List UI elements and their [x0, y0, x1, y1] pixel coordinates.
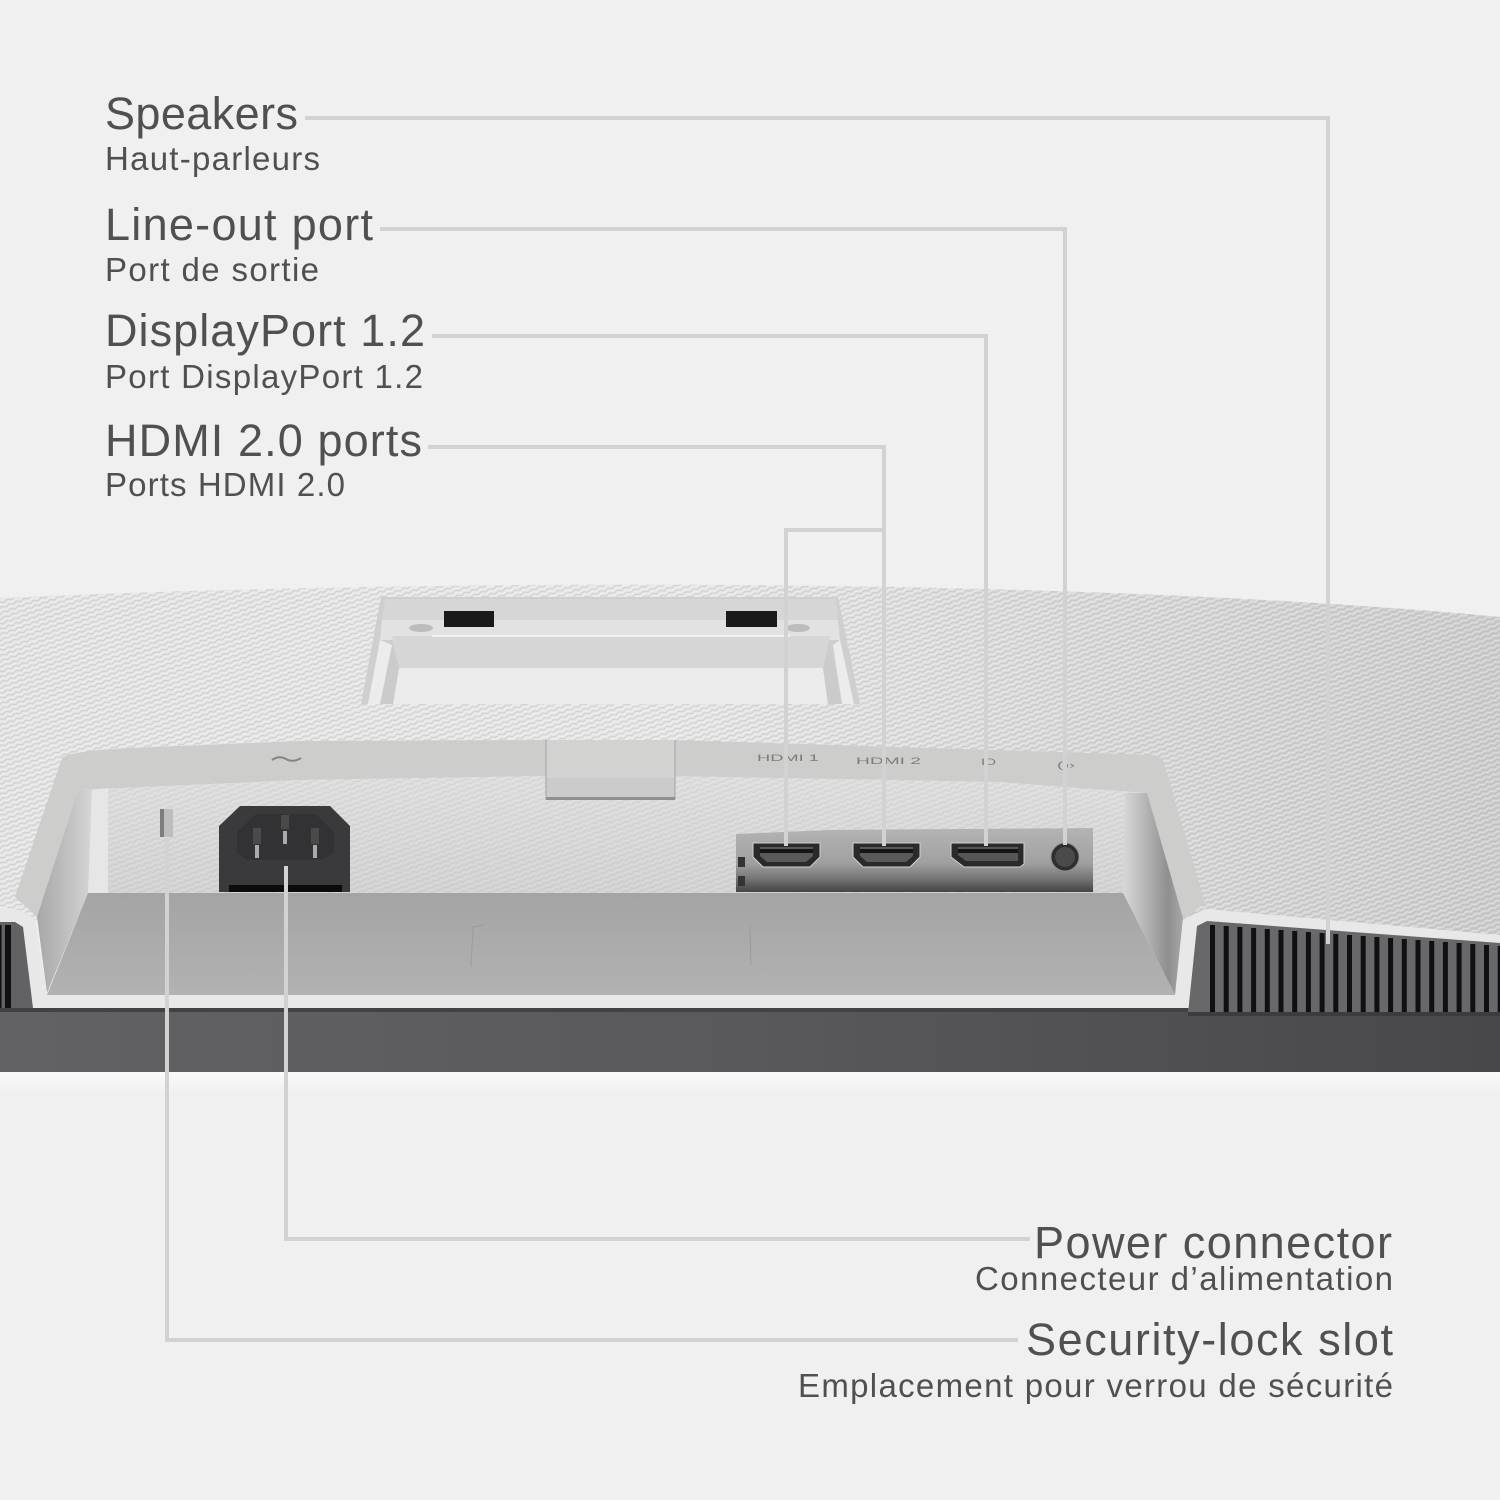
recess floor	[47, 893, 1175, 995]
security lock slot	[160, 809, 173, 837]
leader: security lock slot	[167, 838, 1018, 1340]
port panel	[736, 828, 1093, 892]
power connector	[219, 806, 350, 892]
white edge band	[0, 908, 1500, 1008]
leader: speakers	[305, 118, 1328, 944]
stand latch tab	[546, 740, 675, 800]
recess lip	[15, 740, 1205, 920]
left speaker grille	[0, 922, 33, 1010]
label: line-out port: Line-out port	[105, 199, 373, 250]
label: security-lock slot	[798, 1314, 1393, 1404]
stand mount recess	[361, 597, 860, 704]
textured back surface	[0, 585, 1500, 937]
AC symbol	[272, 757, 301, 761]
label: security-lock slot: Security-lock slot	[1026, 1314, 1393, 1365]
leader: HDMI ports	[428, 447, 884, 846]
slot ends over bar top	[1210, 1008, 1500, 1012]
leader: DisplayPort	[432, 336, 986, 846]
HDMI port 2	[853, 843, 920, 867]
label: line-out port	[105, 199, 373, 288]
mount screw right	[786, 624, 810, 632]
label: HDMI 2.0 ports: HDMI 2.0 ports	[105, 415, 422, 466]
label: power connector: Connecteur d’alimentation	[975, 1260, 1393, 1297]
port labels on lip: HDMI 2	[856, 756, 921, 766]
label: DisplayPort 1.2: Port DisplayPort 1.2	[105, 358, 423, 395]
HDMI port 1	[753, 843, 820, 867]
callout lines	[167, 118, 1328, 1340]
port labels on lip	[757, 753, 1075, 770]
label: speakers	[105, 88, 320, 177]
label: security-lock slot: Emplacement pour verrou de sécurité	[798, 1367, 1393, 1404]
leader: power connector	[286, 866, 1030, 1239]
mount screw left	[409, 624, 433, 632]
label: power connector	[975, 1217, 1393, 1297]
DisplayPort port	[951, 843, 1024, 867]
audio jack	[1051, 843, 1079, 871]
dark base bar	[0, 1008, 1500, 1072]
mount slot left	[444, 611, 494, 627]
label: power connector: Power connector	[1034, 1217, 1392, 1268]
label: HDMI 2.0 ports: Ports HDMI 2.0	[105, 466, 345, 503]
label: HDMI 2.0 ports	[105, 415, 422, 503]
label: speakers: Haut-parleurs	[105, 140, 320, 177]
left inner wall	[37, 790, 92, 993]
port labels on lip: ID	[981, 757, 997, 767]
port labels on lip: HDMI 1	[757, 753, 819, 763]
right speaker grille	[1188, 921, 1500, 1013]
port labels on lip: ()›	[1057, 760, 1075, 770]
label: DisplayPort 1.2: DisplayPort 1.2	[105, 305, 425, 356]
mount slot right	[726, 611, 777, 627]
label: line-out port: Port de sortie	[105, 251, 319, 288]
recess back wall	[78, 775, 1147, 893]
leader: line-out port	[380, 229, 1065, 845]
label: speakers: Speakers	[105, 88, 298, 139]
base bar reflection	[0, 1072, 1500, 1094]
panel clips	[738, 857, 745, 886]
right inner wall	[1123, 793, 1183, 995]
label: DisplayPort 1.2	[105, 305, 425, 395]
monitor rear illustration	[0, 585, 1500, 1094]
